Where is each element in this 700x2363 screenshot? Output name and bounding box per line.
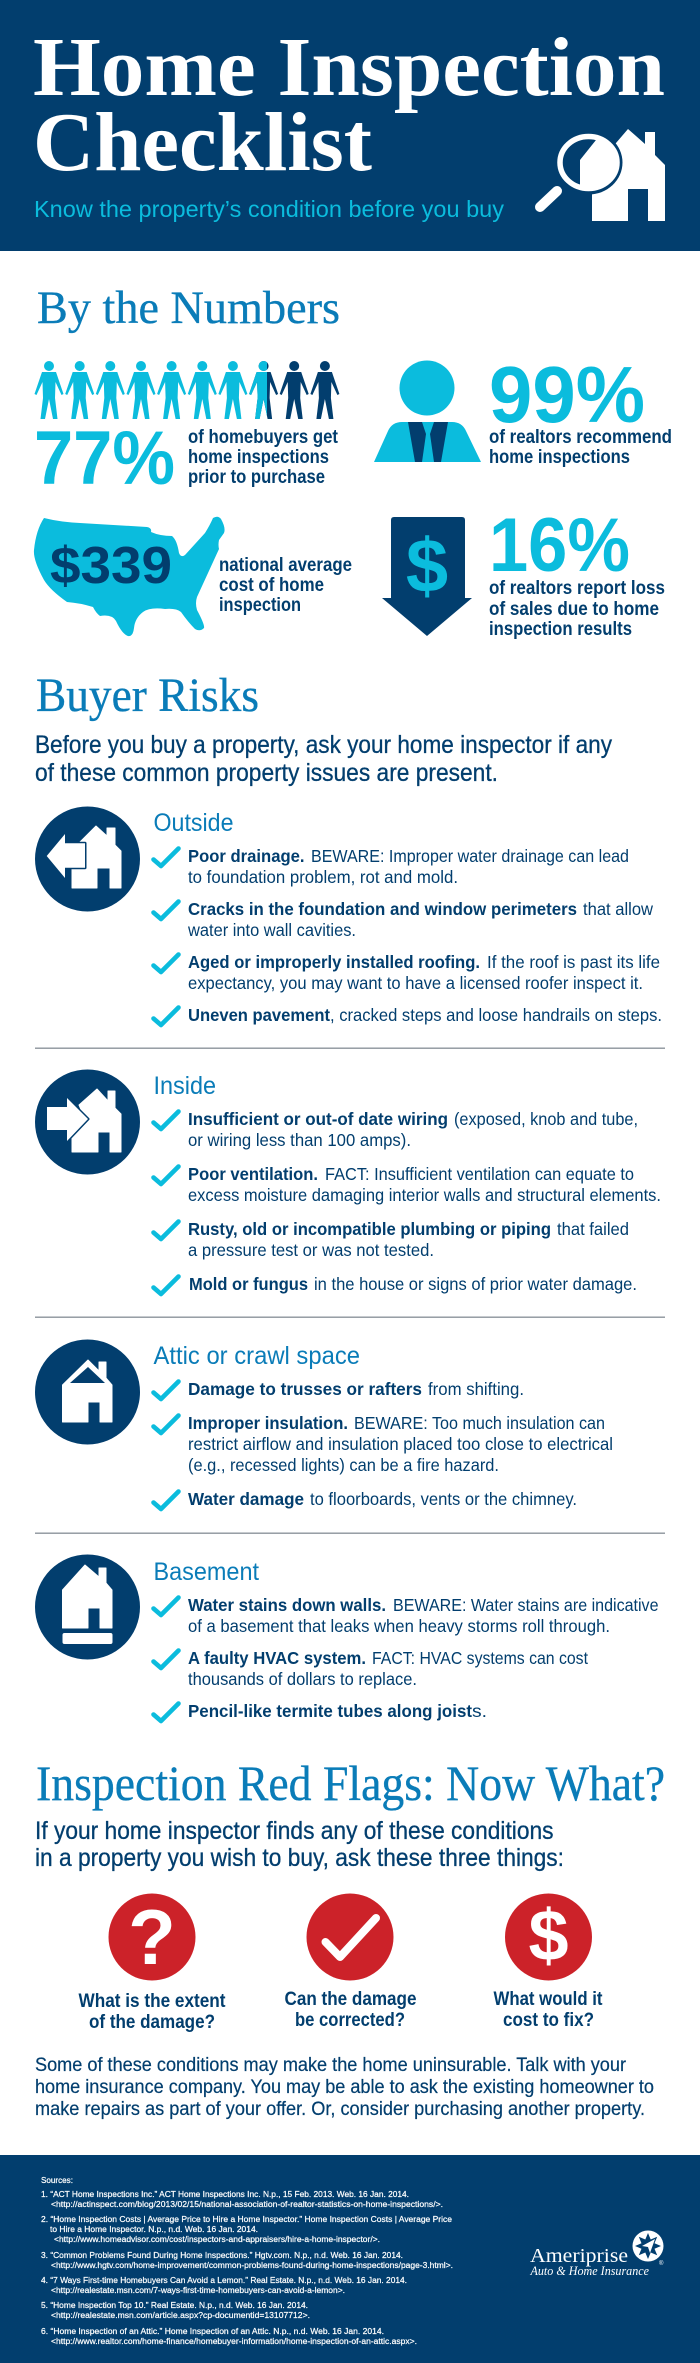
question label: of the damage? (89, 2011, 215, 2033)
stat caption: cost of home (219, 574, 324, 596)
item: hvac: FACT: HVAC systems can cost (372, 1648, 588, 1668)
people pictogram (34, 361, 339, 419)
heading: inside: Inside (154, 1072, 216, 1100)
item: water stains: of a basement that leaks when heavy storms roll through. (188, 1616, 610, 1636)
item: termites: Pencil-like termite tubes along joist (188, 1701, 472, 1721)
item: insulation: BEWARE: Too much insulation can (354, 1413, 605, 1433)
icon: checkmark (306, 1894, 394, 1980)
stat caption: national average (219, 554, 352, 576)
item: water stains: BEWARE: Water stains are indicative (393, 1595, 658, 1615)
panel: stat 77 percent (34, 361, 340, 487)
icon: question mark (108, 1893, 196, 1981)
closing paragraph: home insurance company. You may be able to ask the existing homeowner to (35, 2077, 654, 2098)
closing paragraph (35, 2055, 654, 2120)
item: cracks: Cracks in the foundation and window perimeters (188, 899, 577, 919)
question label (78, 1990, 226, 2033)
item: plumbing: that failed (557, 1219, 629, 1239)
item: cracks (154, 899, 653, 940)
item: wiring (154, 1109, 638, 1150)
item: poor drainage: Poor drainage. (188, 846, 304, 866)
sources list: Sources: (41, 2175, 73, 2185)
icon: outside (35, 806, 140, 912)
item: poor drainage: BEWARE: Improper water drainage can lead (311, 846, 629, 866)
item: ventilation: FACT: Insufficient ventilation can equate to (325, 1164, 634, 1184)
sources list: 1. “ACT Home Inspections Inc.” ACT Home Inspections Inc. N.p., 15 Feb. 2013. Web. 16 Jan. 2014. (41, 2189, 409, 2199)
item: insulation (154, 1413, 613, 1475)
intro text: of these common property issues are present. (35, 759, 498, 787)
intro text: Before you buy a property, ask your home inspector if any (35, 731, 612, 759)
question label: What would it (494, 1988, 603, 2010)
stat caption: of sales due to home (489, 598, 659, 620)
panel: attic (35, 1340, 613, 1509)
stat caption: inspection (219, 594, 301, 616)
panel: basement (35, 1554, 658, 1721)
item: ventilation (154, 1164, 661, 1205)
item: wiring: or wiring less than 100 amps). (188, 1130, 411, 1150)
number: 77% (34, 416, 175, 501)
intro text: red flags: in a property you wish to buy, ask these three things: (35, 1844, 564, 1872)
item: water stains: Water stains down walls. (188, 1595, 386, 1615)
stat caption (489, 577, 665, 640)
panel: stat national cost (34, 517, 352, 636)
question label (284, 1988, 417, 2031)
title: Home Inspection (33, 21, 665, 114)
number: $339 (50, 537, 172, 595)
sources list: <http://actinspect.com/blog/2013/02/15/national-association-of-realtor-statistics-on-home-inspections/>. (51, 2199, 443, 2209)
intro text: red flags (35, 1817, 564, 1872)
icon: down arrow with dollar: $ (406, 524, 448, 609)
question label: What is the extent (78, 1990, 226, 2012)
icon: dollar: $ (528, 1896, 569, 1976)
icon: question mark: ? (128, 1893, 176, 1981)
item: plumbing: a pressure test or was not tested. (188, 1240, 434, 1260)
item: pavement: Uneven pavement (188, 1005, 330, 1025)
icon: US map (34, 517, 225, 636)
stat caption: of homebuyers get (188, 426, 338, 448)
question label: be corrected? (295, 2009, 405, 2031)
title: Checklist (33, 96, 372, 189)
closing paragraph: make repairs as part of your offer. Or, consider purchasing another property. (35, 2099, 645, 2120)
sources list: <http://realestate.msn.com/article.aspx?cp-documentid=13107712>. (51, 2310, 310, 2320)
item: wiring: Insufficient or out-of date wiring (188, 1109, 448, 1129)
logo: Ameriprise: Ameriprise (530, 2245, 628, 2267)
icon: magnifier over house (540, 125, 665, 221)
panel: question extent (78, 1893, 226, 2033)
item: trusses: Damage to trusses or rafters (188, 1379, 422, 1399)
sources list: 3. “Common Problems Found During Home Inspections.” Hgtv.com. N.p., n.d. Web. 16 Jan. 2014. (41, 2250, 403, 2260)
intro text: red flags: If your home inspector finds any of these conditions (35, 1817, 554, 1845)
question label (494, 1988, 603, 2031)
item: mold: Mold or fungus (189, 1274, 308, 1294)
item: roofing: If the roof is past its life (487, 952, 660, 972)
item: mold: in the house or signs of prior water damage. (314, 1274, 637, 1294)
item: ventilation: Poor ventilation. (188, 1164, 318, 1184)
item: cracks: water into wall cavities. (187, 920, 356, 940)
sources list: <http://realestate.msn.com/7-ways-first-time-homebuyers-can-avoid-a-lemon>. (51, 2285, 345, 2295)
icon: basement (35, 1554, 140, 1660)
heading: basement: Basement (154, 1558, 259, 1586)
panel: question cost (494, 1894, 603, 2031)
item: hvac (154, 1648, 588, 1689)
item: mold (154, 1274, 637, 1294)
heading: by the numbers: By the Numbers (37, 282, 340, 334)
item: water damage (154, 1489, 577, 1509)
item: hvac: thousands of dollars to replace. (188, 1669, 417, 1689)
sources list: <http://www.realtor.com/home-finance/homebuyer-information/home-inspection-of-an-attic.aspx>. (51, 2336, 417, 2346)
sources list: <http://www.homeadvisor.com/cost/inspectors-and-appraisers/hire-a-home-inspector/>. (54, 2234, 380, 2244)
item: termites: s. (472, 1701, 487, 1721)
stat caption: home inspections (489, 446, 630, 468)
stat caption (188, 426, 338, 488)
panel: inside (35, 1070, 661, 1294)
sources list: 2. “Home Inspection Costs | Average Price to Hire a Home Inspector.” Home Inspection Costs | Average Price (41, 2214, 452, 2224)
icon: inside (35, 1070, 140, 1174)
icon: down arrow with dollar (382, 517, 472, 636)
number: 99% (489, 350, 645, 439)
icon: attic (35, 1340, 140, 1444)
item: pavement: , cracked steps and loose handrails on steps. (330, 1005, 662, 1025)
logo: Ameriprise: ® (659, 2260, 664, 2267)
item: insulation: Improper insulation. (188, 1413, 348, 1433)
panel: stat 16 percent (382, 503, 665, 640)
icon: realtor bust (374, 360, 481, 462)
intro text (35, 731, 612, 787)
item: roofing: expectancy, you may want to have a licensed roofer inspect it. (188, 973, 643, 993)
panel: header (0, 0, 700, 251)
stat caption: of realtors recommend (489, 426, 672, 448)
item: trusses (154, 1379, 524, 1399)
sources list: 4. “7 Ways First-time Homebuyers Can Avoid a Lemon.” Real Estate. N.p., n.d. Web. 16 Jan. 2014. (41, 2275, 407, 2285)
item: water stains (154, 1595, 658, 1636)
logo: Ameriprise (530, 2230, 664, 2278)
panel: question corrected (284, 1894, 417, 2031)
heading: outside: Outside (154, 809, 234, 837)
item: insulation: (e.g., recessed lights) can be a fire hazard. (188, 1455, 499, 1475)
heading: attic: Attic or crawl space (154, 1342, 360, 1370)
item: poor drainage: to foundation problem, rot and mold. (188, 867, 458, 887)
sources list: <http://www.hgtv.com/home-improvement/common-problems-found-during-home-inspections/page-3.html>. (51, 2260, 453, 2270)
number: 16% (489, 503, 630, 588)
item: water damage: Water damage (188, 1489, 304, 1509)
sources list: 6. “Home Inspection of an Attic.” Home Inspection of an Attic. N.p., n.d. Web. 16 Jan. 2014. (41, 2326, 384, 2336)
question label: cost to fix? (503, 2009, 594, 2031)
question label: Can the damage (284, 1988, 417, 2010)
item: wiring: (exposed, knob and tube, (454, 1109, 638, 1129)
item: insulation: restrict airflow and insulation placed too close to electrical (188, 1434, 613, 1454)
item: cracks: that allow (583, 899, 653, 919)
item: plumbing (154, 1219, 629, 1260)
sources list: to Hire a Home Inspector. N.p., n.d. Web. 16 Jan. 2014. (50, 2224, 258, 2234)
panel: outside (35, 806, 662, 1025)
logo: Ameriprise: Auto & Home Insurance (530, 2264, 649, 2278)
item: poor drainage (154, 846, 629, 887)
sources list (41, 2175, 453, 2346)
item: roofing: Aged or improperly installed roofing. (188, 952, 480, 972)
stat caption (219, 554, 352, 616)
item: water damage: to floorboards, vents or the chimney. (310, 1489, 577, 1509)
item: pavement (154, 1005, 662, 1025)
item: roofing (154, 952, 660, 993)
item: plumbing: Rusty, old or incompatible plumbing or piping (188, 1219, 551, 1239)
item: trusses: from shifting. (428, 1379, 524, 1399)
heading: buyer risks: Buyer Risks (36, 669, 259, 722)
stat caption (489, 426, 672, 468)
stat caption: inspection results (489, 618, 632, 640)
sources list: 5. “Home Inspection Top 10.” Real Estate. N.p., n.d. Web. 16 Jan. 2014. (41, 2300, 308, 2310)
title (33, 21, 665, 189)
stat caption: home inspections (188, 446, 329, 468)
item: ventilation: excess moisture damaging interior walls and structural elements. (188, 1185, 661, 1205)
stat caption: of realtors report loss (489, 577, 665, 599)
closing paragraph: Some of these conditions may make the home uninsurable. Talk with your (35, 2055, 627, 2076)
panel: stat 99 percent (374, 350, 672, 468)
stat caption: prior to purchase (188, 466, 325, 488)
item: hvac: A faulty HVAC system. (188, 1648, 366, 1668)
subtitle: Know the property’s condition before you buy (34, 196, 504, 222)
panel: footer (0, 2155, 700, 2363)
